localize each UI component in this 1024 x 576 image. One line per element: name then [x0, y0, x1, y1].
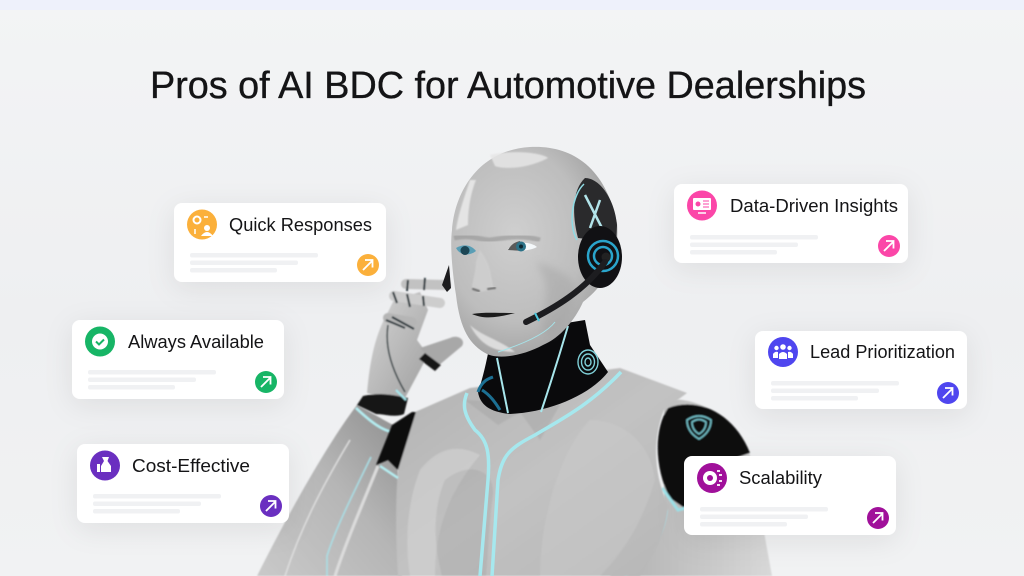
robot hand — [357, 278, 463, 416]
robot right arm — [610, 399, 772, 576]
heading: Cost-Effective — [132, 455, 250, 476]
card: Always Available — [72, 320, 284, 399]
arrow button — [878, 235, 900, 257]
icon: team — [768, 337, 798, 367]
eyes — [456, 241, 537, 255]
robot head — [451, 147, 617, 357]
arrow button — [260, 495, 282, 517]
collar trim — [464, 372, 621, 576]
placeholder lines — [190, 253, 318, 272]
brow shadow — [454, 237, 540, 240]
placeholder lines — [93, 494, 221, 514]
placeholder lines — [771, 381, 899, 400]
title: Pros of AI BDC for Automotive Dealerships — [150, 65, 866, 107]
heading: Lead Prioritization — [810, 341, 955, 362]
icon: money bag — [90, 450, 120, 480]
fingers — [406, 284, 446, 285]
mouth — [472, 313, 515, 317]
robot torso — [376, 368, 687, 576]
icon: monitor — [687, 190, 717, 220]
icon: gears and person — [187, 210, 217, 240]
card: Lead Prioritization — [755, 331, 967, 409]
card: Cost-Effective — [77, 444, 289, 523]
placeholder lines — [88, 370, 216, 390]
icon: check badge — [85, 326, 115, 356]
arrow button — [255, 371, 277, 393]
placeholder lines — [700, 507, 828, 526]
top band — [0, 0, 1024, 10]
headset — [442, 226, 622, 322]
heading: Always Available — [128, 331, 264, 352]
head side panel — [574, 178, 617, 245]
card: Scalability — [684, 456, 896, 535]
heading: Scalability — [739, 467, 823, 488]
heading: Quick Responses — [229, 214, 372, 235]
heading: Data-Driven Insights — [730, 195, 898, 216]
icon: gear network — [697, 463, 727, 493]
card: Data-Driven Insights — [674, 184, 908, 263]
robot left arm — [257, 405, 402, 576]
jaw trim — [498, 322, 555, 352]
arrow button — [357, 254, 379, 276]
robot illustration — [257, 147, 772, 576]
nose — [472, 250, 494, 292]
card: Quick Responses — [174, 203, 386, 282]
arrow button — [937, 382, 959, 404]
neck spiral — [578, 350, 598, 374]
robot neck — [478, 320, 608, 414]
face shading — [535, 262, 575, 336]
arrow button — [867, 507, 889, 529]
placeholder lines — [690, 235, 818, 254]
